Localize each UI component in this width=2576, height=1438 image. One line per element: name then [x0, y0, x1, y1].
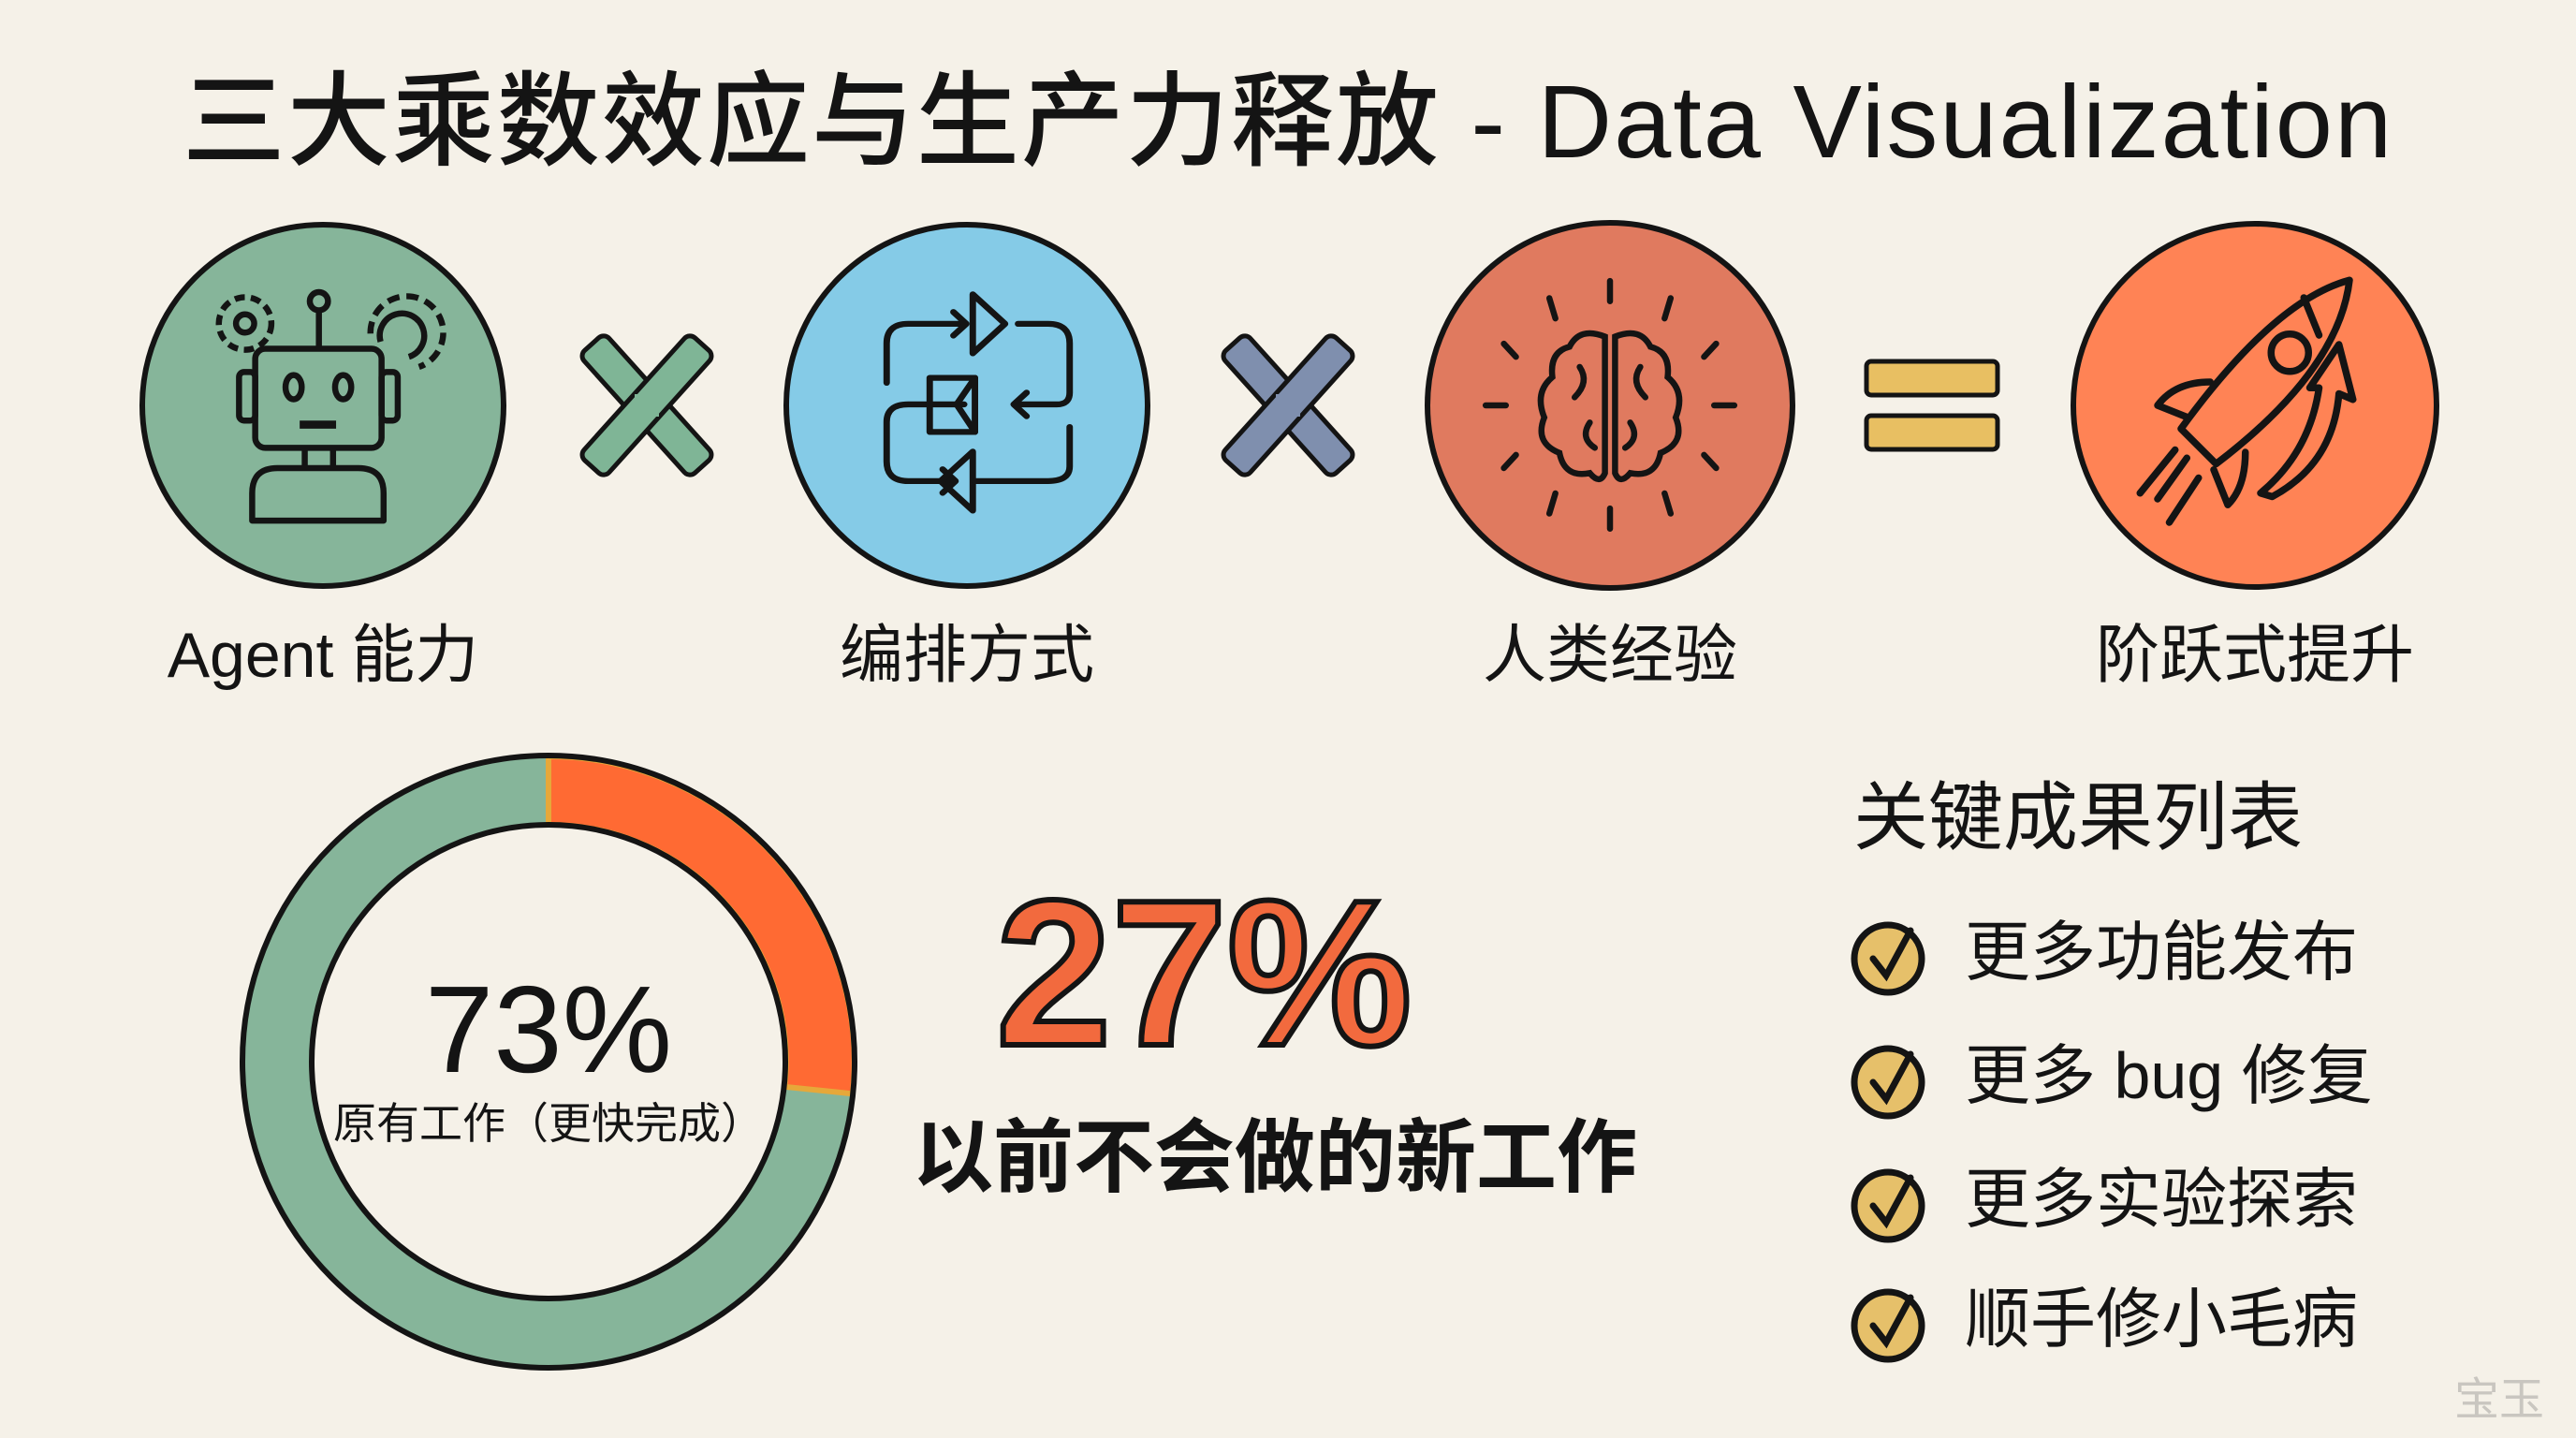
icon: robot — [219, 292, 444, 521]
donut chart — [240, 753, 857, 1371]
segment: 27% — [549, 756, 855, 1093]
circle: human experience — [1427, 223, 1793, 588]
checklist — [1852, 916, 2373, 1363]
label: leap: 阶跃式提升 — [2096, 620, 2414, 691]
donut center: 73%: 73% — [425, 961, 672, 1098]
item 4: 顺手修小毛病 — [1965, 1283, 2358, 1356]
icon: orchestration arrows — [886, 294, 1070, 510]
item 1: 更多功能发布 — [1965, 916, 2358, 989]
icon: rocket — [2140, 280, 2353, 522]
title: 三大乘数效应与生产力释放 - Data Visualization — [183, 65, 2393, 180]
item 3: 更多实验探索 — [1965, 1163, 2358, 1236]
big stat 27%: 27% — [996, 858, 1412, 1090]
label: agent: Agent 能力 — [168, 620, 478, 691]
circle: leap improvement — [2073, 224, 2437, 587]
circle: orchestration — [786, 225, 1148, 586]
donut subtitle: 原有工作（更快完成） — [333, 1099, 764, 1148]
circle: agent — [142, 225, 504, 586]
label: orchestration: 编排方式 — [840, 620, 1094, 691]
icon: multiply 2 — [1221, 333, 1355, 477]
icon: brain — [1486, 281, 1734, 529]
item 2: 更多 bug 修复 — [1965, 1039, 2373, 1112]
icon: equals — [1866, 361, 1998, 449]
list heading: 关键成果列表 — [1853, 776, 2303, 859]
watermark: 宝玉 — [2454, 1375, 2544, 1425]
label: human experience: 人类经验 — [1483, 620, 1737, 691]
stat caption: 以前不会做的新工作 — [913, 1113, 1637, 1203]
equation diagram — [139, 220, 2439, 591]
icon: multiply 1 — [579, 333, 714, 477]
